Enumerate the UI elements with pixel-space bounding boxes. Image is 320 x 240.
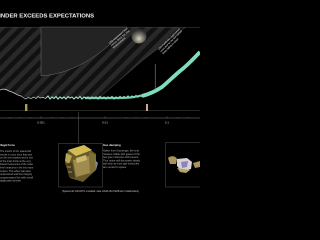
text block: centrifugal force: lowest frequencies of the noise (0, 163, 34, 166)
annotation: left rotated label: measurement (112, 37, 126, 50)
text block: centrifugal force: compensated for with small (0, 176, 34, 179)
image frame: gas damping (166, 142, 200, 187)
panel: requirement region (41, 27, 127, 76)
text block: centrifugal force: adjustments (0, 180, 22, 183)
text block: gas damping: masses collide with gases of the (103, 153, 141, 156)
axis label: 0.01: 0.01 (102, 120, 108, 124)
text block: centrifugal force: The motion of the spacecraft (0, 150, 31, 153)
marker: pink bar (146, 104, 148, 111)
text block: gas damping: are vented to space. (103, 166, 127, 169)
text block: centrifugal force: results in a tiny force that acts (0, 153, 33, 156)
annotation: left rotated label (108, 27, 133, 50)
connector: axis to cube (77, 112, 79, 143)
icon: test mass housing (168, 156, 200, 173)
chart: spectral spike (154, 64, 156, 91)
axis label: 0.1: 0.1 (165, 120, 169, 124)
chart: noise trace flat section (46, 95, 144, 99)
chart: noise trace thick section (85, 94, 146, 98)
line: requirement boundary (100, 27, 186, 97)
chart: noise trace rising section (142, 52, 200, 96)
text block: centrifugal force: of the main limits at the very (0, 160, 32, 163)
panel: striped noise-limit region (0, 27, 186, 98)
line: upper marker rule (0, 110, 200, 112)
chart: white early data line (0, 89, 46, 99)
text block: centrifugal force: motion. This effect was later (0, 170, 31, 173)
rule: top of chart (0, 26, 200, 28)
text block: gas damping: with time as more gas molecules (103, 163, 140, 166)
axis label: 0.001: 0.001 (37, 120, 45, 124)
caption: credit: (Spacecraft: ESA/ATG medialab; data: ESA/LISA Pathfinder Collaboration) (62, 190, 139, 193)
icon: moon (132, 28, 146, 44)
annotation: right rotated label: freely falling in space (162, 37, 180, 55)
annotation: right rotated label: noise level for the test masses (160, 29, 183, 53)
text block: centrifugal force: on the test masses and is one (0, 157, 34, 160)
text block: gas damping: Noise from housings: the test (103, 150, 139, 152)
annotation: right rotated label: LISA Pathfinder requirement (158, 27, 181, 51)
text block: centrifugal force (0, 143, 34, 183)
axis (0, 116, 200, 124)
icon: gold test mass cube (65, 145, 98, 182)
text block: gas damping: few gas molecules still present. (103, 156, 139, 159)
text block: gas damping: This noise will decrease slowly (103, 159, 141, 162)
text block: centrifugal force: level measured in the test mass (0, 166, 34, 170)
annotation: left rotated label: LISA requirement level (108, 27, 129, 45)
infographic (0, 14, 200, 193)
text block: centrifugal force: understood and then largely (0, 173, 33, 176)
text block: gas damping (103, 143, 141, 169)
marker: gold bar (25, 104, 27, 111)
annotation: left rotated label: noise limit for the (110, 29, 131, 47)
image frame: test mass (58, 144, 102, 187)
text block: gas damping: Gas damping (103, 143, 121, 147)
